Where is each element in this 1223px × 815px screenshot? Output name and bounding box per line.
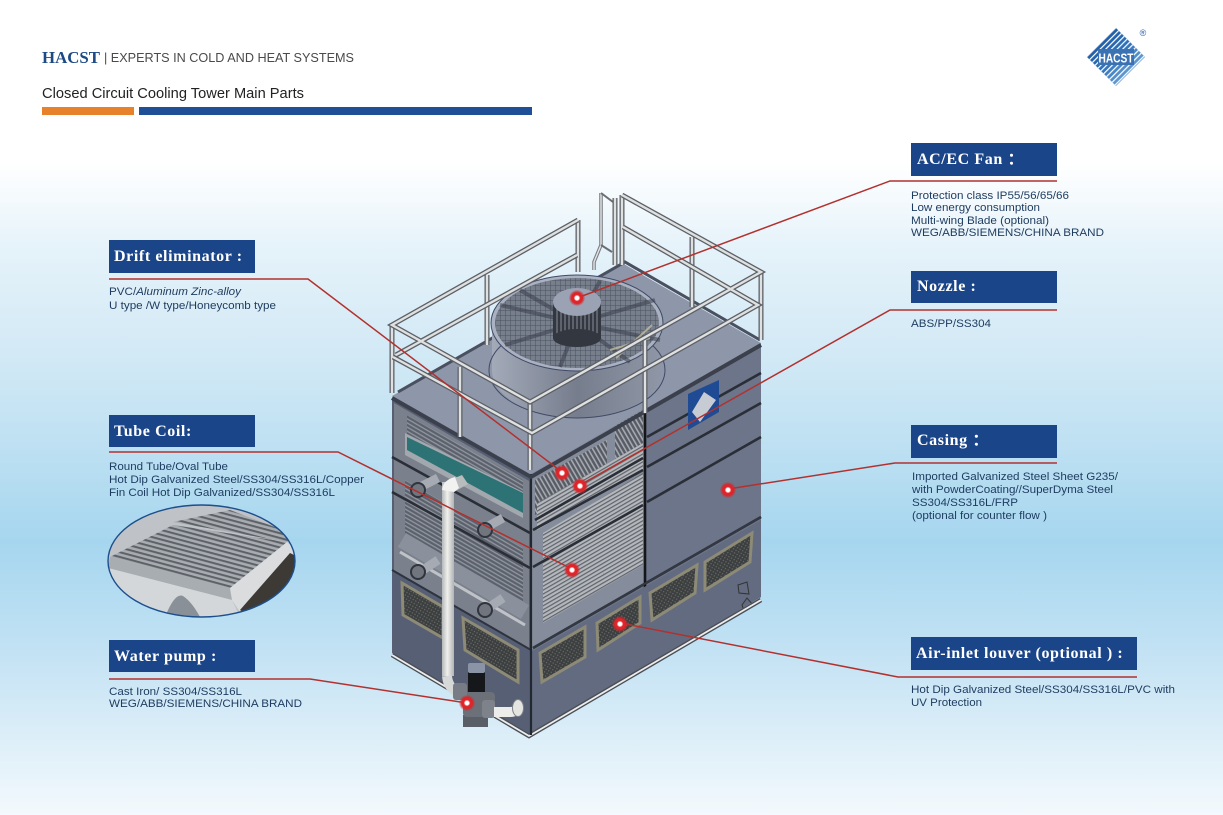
tower left face	[392, 398, 531, 735]
title: Closed Circuit Cooling Tower Main Parts	[42, 86, 304, 102]
callout: Nozzle: ABS/PP/SS304	[911, 318, 991, 330]
guard rails	[392, 195, 761, 470]
callout: AC/EC Fan: AC/EC Fan ：	[917, 151, 1024, 168]
pipe flanges	[411, 478, 503, 617]
tower roof deck	[392, 263, 761, 476]
callout: AC/EC Fan: Protection class IP55/56/65/66	[911, 190, 1069, 202]
callout: Drift eliminator: Drift eliminator :	[114, 248, 243, 265]
callout: Drift eliminator: U type /W type/Honeycomb type	[109, 300, 276, 312]
ladder	[594, 193, 613, 270]
callout: Casing	[728, 425, 1119, 522]
air-inlet louvers left	[402, 583, 443, 638]
brand plate	[688, 380, 719, 430]
cooling tower illustration	[392, 193, 761, 736]
callout: Tube Coil: Tube Coil:	[114, 423, 192, 440]
callout: Casing: Imported Galvanized Steel Sheet G235/	[912, 471, 1119, 483]
callout: Air-inlet louver: UV Protection	[911, 697, 982, 709]
fan housing	[489, 275, 665, 418]
callout: Nozzle	[580, 271, 1057, 485]
icon: HACST logo	[1087, 28, 1147, 86]
header brand line: HACST	[42, 48, 100, 67]
callout: Drift eliminator	[109, 240, 562, 472]
icon: HACST logo: HACST	[1098, 50, 1134, 66]
callout: Air-inlet louver: Air-inlet louver (optional ) :	[916, 645, 1123, 662]
discharge pipe	[442, 475, 468, 692]
callout: Casing: SS304/SS316L/FRP	[912, 497, 1018, 509]
callout: AC/EC Fan: Multi-wing Blade (optional)	[911, 215, 1049, 227]
callout markers	[459, 290, 736, 711]
icon: HACST logo: ®	[1140, 28, 1147, 38]
base skid	[392, 600, 761, 736]
callout: Water pump	[109, 640, 467, 710]
header brand line: | EXPERTS IN COLD AND HEAT SYSTEMS	[104, 50, 354, 65]
callout: Tube Coil	[109, 415, 572, 569]
callout: AC/EC Fan: WEG/ABB/SIEMENS/CHINA BRAND	[911, 227, 1104, 239]
callout: Tube Coil: Hot Dip Galvanized Steel/SS304/SS316L/Copper	[109, 474, 364, 486]
callout: AC/EC Fan: Low energy consumption	[911, 202, 1040, 214]
callout: Casing: Casing ：	[917, 432, 989, 449]
tower right face	[531, 343, 761, 735]
air-inlet louvers right	[540, 627, 585, 682]
tube coil photo	[108, 505, 296, 617]
callout: Casing: with PowderCoating//SuperDyma Steel	[911, 484, 1113, 496]
callout: Casing: (optional for counter flow )	[912, 510, 1047, 522]
callout: Water pump: WEG/ABB/SIEMENS/CHINA BRAND	[109, 698, 302, 710]
callout: Water pump: Cast Iron/ SS304/SS316L	[109, 686, 242, 698]
callout: Drift eliminator: PVC/Aluminum Zinc-alloy	[109, 286, 243, 298]
header brand line	[42, 48, 354, 67]
callout: AC/EC Fan	[577, 143, 1104, 298]
callout: Air-inlet louver: Hot Dip Galvanized Steel/SS304/SS316L/PVC with	[911, 684, 1175, 696]
title accent bars	[42, 107, 532, 115]
water pump	[453, 663, 524, 727]
callout: Nozzle: Nozzle :	[917, 278, 976, 295]
callout: Tube Coil: Fin Coil Hot Dip Galvanized/SS304/SS316L	[109, 487, 335, 499]
callout: Air-inlet louver	[620, 623, 1175, 709]
roof edge band	[392, 345, 761, 477]
callout: Tube Coil: Round Tube/Oval Tube	[109, 461, 228, 473]
callout: Water pump: Water pump :	[114, 648, 217, 665]
